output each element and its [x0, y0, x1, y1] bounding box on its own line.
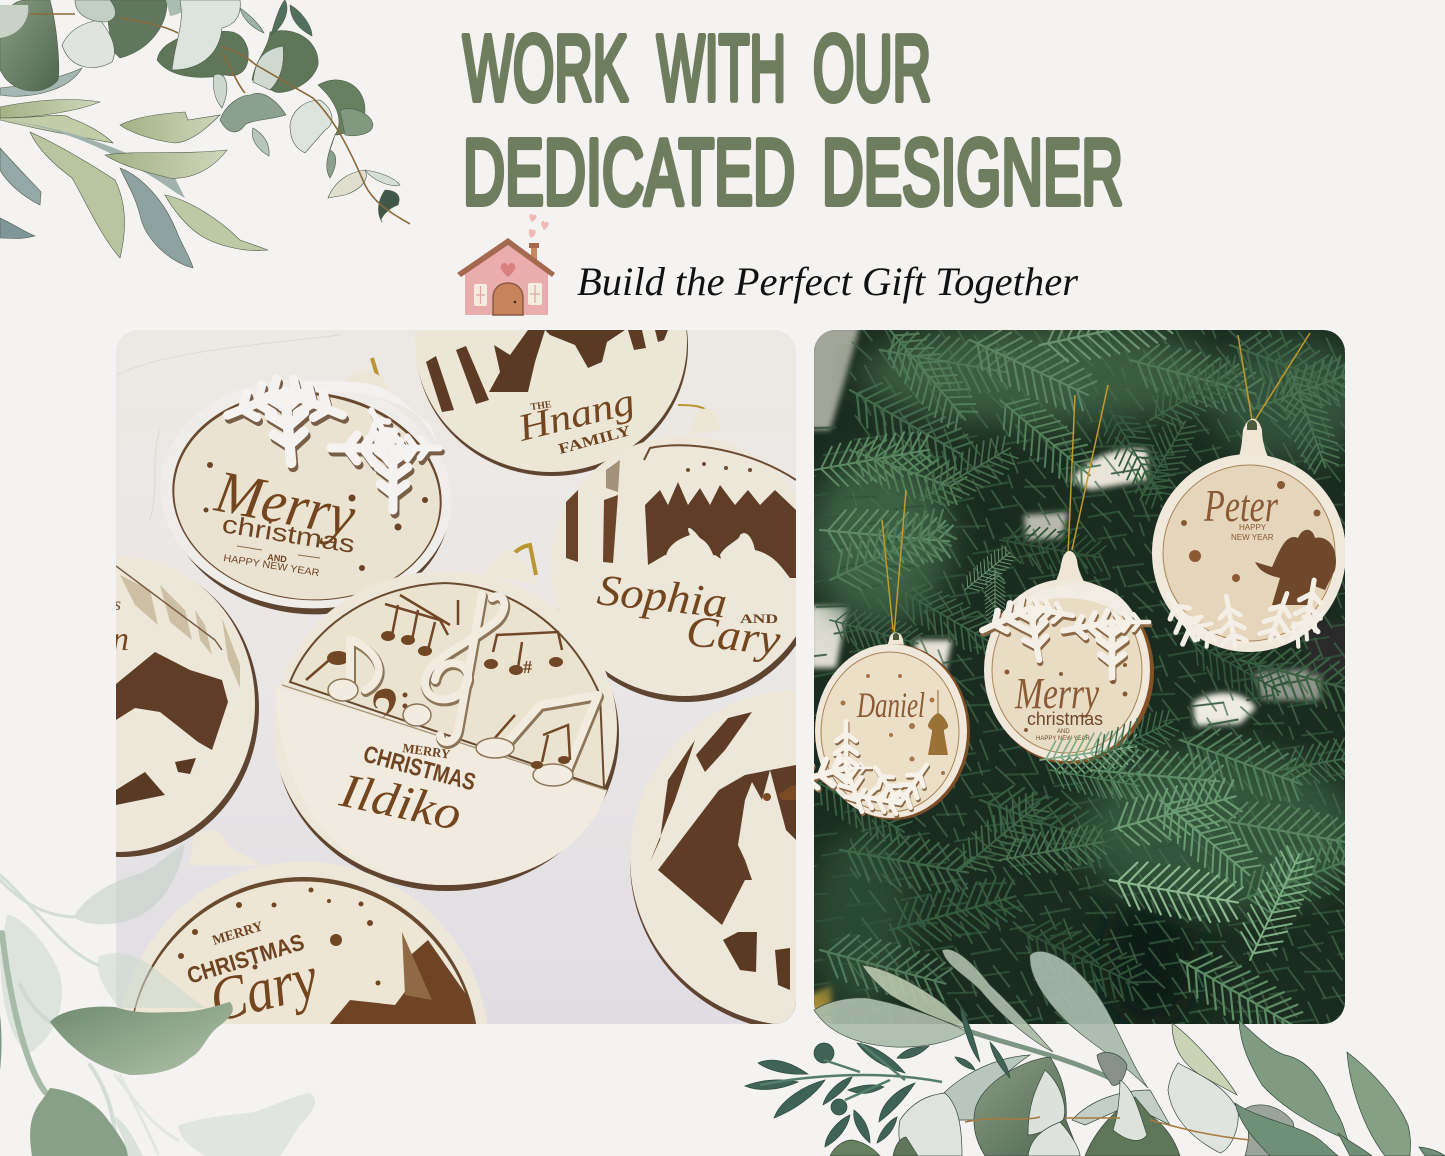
ornament: Sophia and Cary: Cary	[684, 606, 783, 665]
ornament: Merry Christmas Cary: CHRISTMAS	[184, 929, 307, 989]
photo: laser-cut wooden ornaments on marble	[116, 330, 796, 1024]
ornament: music notes Ildiko: #	[523, 657, 532, 677]
ornament: Merry Christmas on tree: christmas	[1027, 709, 1103, 729]
gold hanging strings	[882, 333, 1310, 635]
ornament: music notes Ildiko	[273, 545, 619, 891]
title: DEDICATED	[463, 120, 795, 224]
ornament: Merry Christmas Cary: Cary	[203, 943, 325, 1036]
photo: ornaments hanging on Christmas tree	[814, 330, 1345, 1024]
ornament: Merry Christmas on tree: AND	[1057, 729, 1070, 735]
subtitle: Build the Perfect Gift Together	[577, 259, 1078, 304]
ornament: Merry Christmas snowflake: AND	[267, 552, 288, 564]
bright background gaps behind the tree	[810, 326, 1350, 1028]
ornament: bison: n	[112, 621, 129, 658]
ornament: Merry Christmas Cary: MERRY	[211, 919, 265, 949]
ornament: bison	[116, 556, 259, 857]
foliage: top-left watercolor leaves	[0, 0, 410, 268]
ornament: music notes Ildiko: Ildiko	[335, 764, 466, 841]
ornament: The Hnang Family: THE	[530, 399, 553, 413]
tree tone masses	[810, 325, 1370, 1030]
ornament: Merry Christmas snowflake	[172, 357, 447, 614]
ornament: Merry Christmas snowflake: christmas	[220, 510, 357, 559]
ornament: Merry Christmas snowflake: Merry	[210, 458, 361, 550]
ornament: Sophia and Cary: AND	[740, 611, 778, 626]
ornament: Daniel: Daniel	[856, 685, 925, 725]
title: WITH	[657, 16, 786, 120]
title: DESIGNER	[822, 120, 1123, 224]
foliage: bottom-left pale eucalyptus	[0, 843, 315, 1156]
title	[463, 16, 1123, 224]
ornament: bison: s	[114, 594, 121, 614]
ornament: music notes Ildiko: CHRISTMAS	[360, 741, 479, 797]
ornament: Merry Christmas snowflake: HAPPY NEW YEAR	[223, 553, 320, 579]
foliage: bottom-right watercolor leaves and eucalyptus	[745, 949, 1445, 1156]
title: WORK	[463, 16, 628, 120]
ornament: Sophia and Cary	[551, 405, 819, 702]
icon: pink house with hearts	[457, 214, 555, 315]
ornament: Peter	[1152, 419, 1346, 652]
ornament: music notes Ildiko: MERRY	[402, 740, 452, 762]
title: OUR	[813, 16, 931, 120]
ornament: Merry Christmas on tree: HAPPY NEW YEAR	[1036, 736, 1090, 742]
ornament: The Hnang Family: FAMILY	[557, 423, 633, 458]
fine needle texture	[814, 420, 1345, 1024]
ornament: Merry Christmas on tree: Merry	[1014, 669, 1099, 718]
ornament: Peter: HAPPY	[1239, 523, 1267, 532]
ornament: The Hnang Family	[415, 330, 688, 476]
ornament: Sophia and Cary: Sophia	[595, 565, 729, 628]
ornament: Daniel	[814, 632, 970, 820]
needle branches	[814, 330, 1345, 1024]
ornament: Merry Christmas Cary	[118, 830, 488, 1036]
ornament: Peter: Peter	[1203, 480, 1279, 531]
ornament: Peter: NEW YEAR	[1231, 533, 1274, 542]
ornament: Merry Christmas on tree	[977, 551, 1154, 764]
ornament: The Hnang Family: Hnang	[513, 380, 639, 450]
ornament: deer	[630, 690, 796, 1024]
foreground branch over ornament	[1037, 705, 1181, 803]
